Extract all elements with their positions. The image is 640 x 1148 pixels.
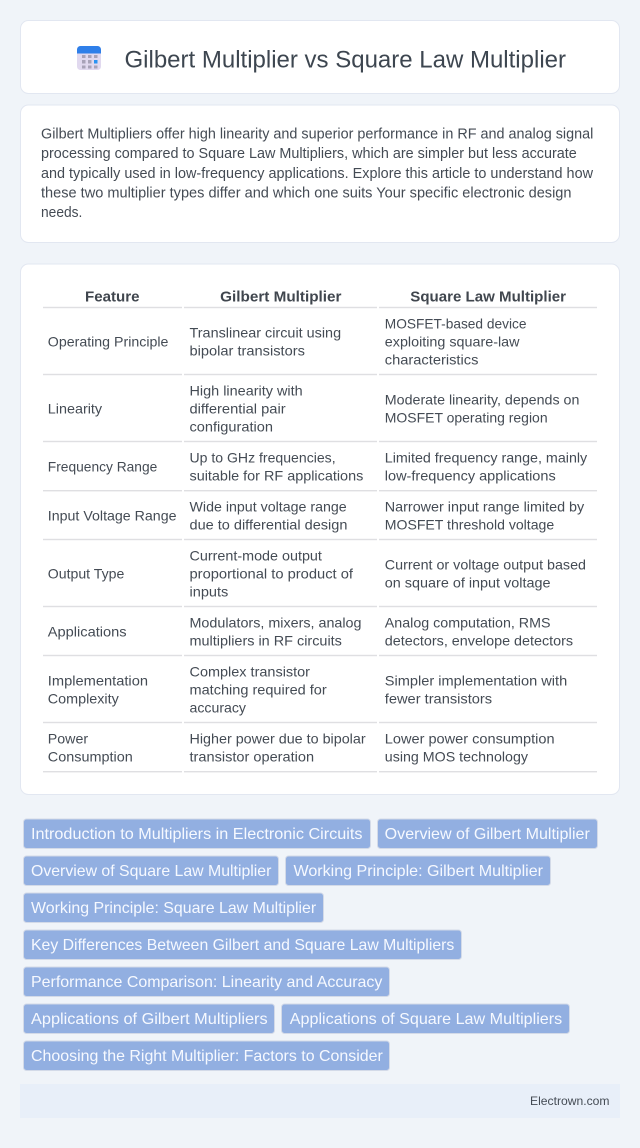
row: linearity: MOSFET operating region xyxy=(385,410,548,426)
row: linearity: High linearity with xyxy=(190,382,303,398)
row: power consumption xyxy=(48,730,555,764)
row: operating principle: bipolar transistors xyxy=(190,342,305,358)
row: frequency range: Frequency Range xyxy=(48,458,158,474)
row: linearity: configuration xyxy=(190,418,273,434)
row: output type: Current-mode output xyxy=(190,548,322,564)
icon: calendar grid xyxy=(77,46,101,70)
row: linearity: Moderate linearity, depends on xyxy=(385,392,579,408)
row: operating principle: exploiting square-law xyxy=(385,334,520,350)
tag: performance comparison: Performance Comparison: Linearity and Accuracy xyxy=(31,974,382,991)
row: power consumption: Lower power consumption xyxy=(385,730,555,746)
intro paragraph: processing compared to Square Law Multipliers, which are simpler but less accurate xyxy=(41,146,577,162)
tag: working principle square law xyxy=(24,893,324,922)
tag: introduction xyxy=(24,819,370,848)
row: output type: Current or voltage output based xyxy=(385,556,586,572)
row: applications: Analog computation, RMS xyxy=(385,614,550,630)
tag: working principle gilbert: Working Principle: Gilbert Multiplier xyxy=(294,863,544,880)
row: operating principle: characteristics xyxy=(385,352,478,368)
row: power consumption: Power xyxy=(48,730,88,746)
row: applications: Applications xyxy=(48,624,127,640)
row: implementation complexity: Complex transistor xyxy=(190,664,310,680)
row: input voltage range: Input Voltage Range xyxy=(48,508,177,524)
row: linearity: differential pair xyxy=(190,400,286,416)
row: linearity: Linearity xyxy=(48,400,102,416)
panel: comparison table xyxy=(20,264,620,794)
row: applications xyxy=(48,614,573,648)
tag: performance comparison xyxy=(24,967,390,996)
row: implementation complexity: Complexity xyxy=(48,690,119,706)
tag: working principle gilbert xyxy=(286,856,550,886)
row: applications: Modulators, mixers, analog xyxy=(190,614,362,630)
row: operating principle: Translinear circuit using xyxy=(190,324,341,340)
intro paragraph: these two multiplier types differ and which one suits Your specific electronic design xyxy=(41,185,572,201)
row: operating principle: Operating Principle xyxy=(48,334,169,350)
title: Gilbert Multiplier vs Square Law Multiplier xyxy=(124,46,566,74)
row: frequency range: suitable for RF applications xyxy=(190,468,363,484)
row: output type: Output Type xyxy=(48,566,125,582)
tag: key differences: Key Differences Between Gilbert and Square Law Multipliers xyxy=(31,937,454,954)
intro paragraph: and typically used in low-frequency applications. Explore this article to understand how xyxy=(41,166,594,182)
row: output type: inputs xyxy=(190,584,228,600)
row: input voltage range: Wide input voltage range xyxy=(190,498,347,514)
row: applications: detectors, envelope detectors xyxy=(385,632,573,648)
row: implementation complexity: fewer transistors xyxy=(385,690,492,706)
tag: applications gilbert: Applications of Gilbert Multipliers xyxy=(31,1011,268,1028)
tag: key differences xyxy=(24,930,462,960)
topic tags xyxy=(24,819,598,1070)
header panel xyxy=(20,20,620,94)
row: implementation complexity: matching required for xyxy=(190,682,327,698)
tag: working principle square law: Working Principle: Square Law Multiplier xyxy=(31,900,317,917)
panel: introduction xyxy=(20,105,620,242)
row: power consumption: Higher power due to bipolar xyxy=(190,730,366,746)
footer source credit: Electrown.com xyxy=(530,1094,610,1108)
tag: overview square law xyxy=(24,856,278,886)
tag: overview gilbert xyxy=(378,819,598,848)
row: input voltage range: MOSFET threshold voltage xyxy=(385,516,554,532)
row: output type xyxy=(48,548,586,600)
row: applications: multipliers in RF circuits xyxy=(190,632,342,648)
row: implementation complexity: accuracy xyxy=(190,700,246,716)
table header row: Gilbert Multiplier xyxy=(220,288,342,306)
tag: choosing the right multiplier xyxy=(24,1041,390,1070)
intro paragraph: Gilbert Multipliers offer high linearity and superior performance in RF and analog signal xyxy=(41,127,593,143)
footer xyxy=(20,1084,620,1118)
table header row: Feature xyxy=(85,288,140,306)
row: input voltage range: due to differential design xyxy=(190,516,347,532)
table header row: Square Law Multiplier xyxy=(410,288,566,306)
row: input voltage range xyxy=(48,498,584,532)
table header row xyxy=(85,288,566,306)
row: power consumption: transistor operation xyxy=(190,748,314,764)
row: operating principle: MOSFET-based device xyxy=(385,316,527,332)
row: output type: proportional to product of xyxy=(190,566,353,582)
row: output type: on square of input voltage xyxy=(385,574,551,590)
row: power consumption: using MOS technology xyxy=(385,748,528,764)
intro paragraph xyxy=(41,127,594,221)
row: frequency range xyxy=(48,450,587,484)
row: input voltage range: Narrower input range limited by xyxy=(385,498,584,514)
tag: applications gilbert xyxy=(24,1004,274,1034)
row: power consumption: Consumption xyxy=(48,748,133,764)
intro paragraph: needs. xyxy=(41,205,82,221)
row: frequency range: Limited frequency range, mainly xyxy=(385,450,587,466)
row: implementation complexity xyxy=(48,664,567,716)
tag: applications square law xyxy=(282,1004,570,1034)
row: implementation complexity: Implementation xyxy=(48,672,148,688)
row: linearity xyxy=(48,382,579,434)
tag: overview square law: Overview of Square Law Multiplier xyxy=(31,863,272,880)
tag: choosing the right multiplier: Choosing the Right Multiplier: Factors to Consider xyxy=(31,1048,383,1065)
row: implementation complexity: Simpler implementation with xyxy=(385,672,567,688)
tag: introduction: Introduction to Multipliers in Electronic Circuits xyxy=(31,826,362,843)
tag: applications square law: Applications of Square Law Multipliers xyxy=(290,1011,562,1028)
row: frequency range: low-frequency applications xyxy=(385,468,556,484)
row: operating principle xyxy=(48,316,527,368)
row: frequency range: Up to GHz frequencies, xyxy=(190,450,336,466)
tag: overview gilbert: Overview of Gilbert Multiplier xyxy=(385,826,590,843)
